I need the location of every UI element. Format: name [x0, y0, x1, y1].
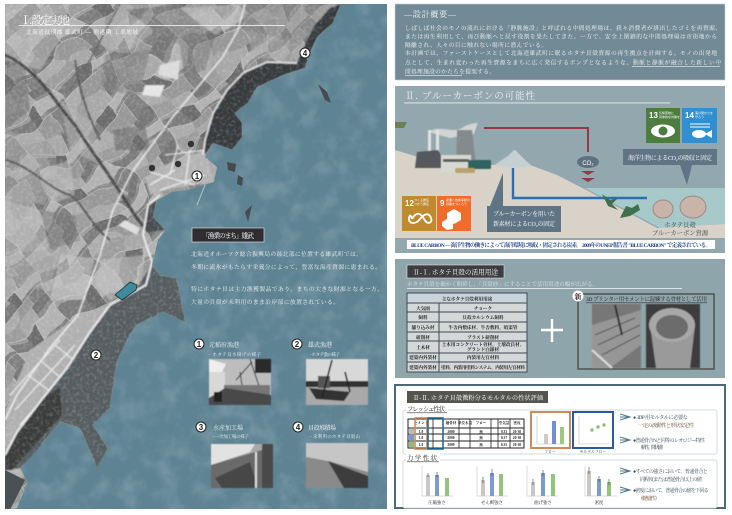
- roads: [5, 4, 245, 420]
- panel: blue carbon: [395, 86, 725, 253]
- fresh findings: 一定の流動性と形状安定性: [638, 421, 695, 429]
- shell label: [652, 220, 709, 237]
- icon: SDG 12: 12: [405, 199, 414, 208]
- chart: density: [585, 466, 617, 506]
- icon: SDG 9: [437, 196, 471, 231]
- table: mix data: 無: [479, 435, 483, 440]
- photo 3: processing plant: 水産加工場: [213, 424, 243, 432]
- map markers: [91, 48, 310, 360]
- photo 4: shell pile: 貝殻堆積場: [308, 424, 336, 432]
- icon: snowy hills: [494, 150, 532, 168]
- icon: SDG 13: 具体的な対策を: [659, 114, 680, 119]
- table: shell usage: 研削材: [416, 334, 430, 341]
- chart: density: 密度: [595, 499, 604, 506]
- icon: SDG 14: 海の豊かさを: [695, 110, 713, 115]
- green corner: [395, 122, 407, 128]
- shell label: ブルーカーボン資源: [652, 228, 709, 237]
- text block: town description: 大量の貝殻が未利用のまま沿岸部に放置されている。: [191, 298, 339, 306]
- panel: shell uses: [395, 259, 725, 378]
- table: shell usage: 大気圏: [416, 305, 430, 312]
- text block: town description: 北海道オホーツク総合振興局の最北部に位置する雄武町では、: [191, 250, 362, 258]
- panel: 3D printing aggregate: 新: [574, 292, 582, 301]
- photo 2: boat: [292, 339, 368, 405]
- table: shell usage: 土木材: [416, 344, 430, 351]
- photo 2: boat: 雄武漁港: [308, 341, 332, 349]
- blue carbon definition: [407, 240, 715, 249]
- photo 2: boat: - ホタテ漁の様子: [310, 351, 340, 358]
- heading: shell uses: [407, 265, 682, 289]
- chart: flow: フロー: [544, 450, 556, 454]
- table: mix data: 密度: [513, 420, 521, 425]
- ravines: [5, 55, 150, 232]
- site polygon: [115, 282, 137, 300]
- chart: flow: [531, 412, 570, 454]
- chart: flow retention: モルタルフロー: [580, 449, 606, 454]
- section: mechanical properties: [403, 453, 717, 508]
- table: shell usage: 建築内外装材: [409, 364, 437, 371]
- table: shell usage: チョーク: [474, 305, 492, 312]
- table: shell usage: 建築内外装材: [409, 354, 437, 361]
- arrow: CO2 emission: [484, 128, 588, 152]
- heading: shell uses: Ⅱ-Ⅰ. ホタテ貝殻の活用用途: [413, 268, 498, 276]
- photo 1: harbour: - ホタテ貝水揚げの様子: [209, 351, 262, 358]
- heading: mortar evaluation: [407, 391, 548, 403]
- icon: SDG 14: [682, 108, 717, 143]
- table: mix data: 20-30: [513, 430, 521, 434]
- chart: flow retention: [573, 412, 613, 454]
- chart: bending strength: [527, 466, 558, 506]
- aerial land: [5, 4, 341, 509]
- overview text: または再生利用して、再び動脈へと戻す役割を果たしてきた。一方で、安全上閉鎖的な中間処理場は市街地から: [405, 32, 717, 40]
- table: mix data: フロー: [476, 421, 487, 425]
- town south: [5, 305, 110, 455]
- icon: SDG 12: つくる責任: [414, 197, 429, 202]
- fresh findings: （粘性、降伏値）: [638, 443, 666, 451]
- fresh findings: [620, 413, 706, 451]
- icon: scallop shells: [653, 196, 706, 218]
- table: shell usage: 主なホタテ貝殻利用用途: [442, 296, 493, 302]
- overview text: しばしば社会のモノの流れにおける「静脈施設」と呼ばれる中間処理場は、我々消費者が排出したゴミを再資源、: [405, 24, 721, 32]
- table: mix data: 2000: [447, 436, 455, 440]
- icon: factory: [415, 122, 491, 173]
- CO2 badge: CO₂: [582, 161, 594, 167]
- heading: blue carbon: Ⅱ. ブルーカーボンの可能性: [405, 90, 535, 102]
- section: mechanical properties: 力学性状: [407, 453, 438, 462]
- table: mix data: 0.33: [501, 430, 507, 434]
- table: mix data: セメント: [414, 420, 428, 425]
- map markers: 2: [94, 351, 99, 360]
- photo 1: harbour: 1: [197, 340, 202, 349]
- map markers: 1: [195, 172, 200, 181]
- chart: shear strength: [477, 466, 508, 506]
- overview heading: ―設計概要―: [403, 9, 457, 19]
- table: mix data: 2000: [447, 443, 455, 447]
- overview text: 本計画では、ファーストケースとして北海道雄武町に眠るホタテ貝殻資源の再生拠点を計画する。モノの出発地: [405, 49, 717, 57]
- icon: SDG 13: 13: [649, 111, 658, 120]
- icon: seaweed: [602, 194, 640, 218]
- chart: shear strength: せん断強さ: [481, 499, 503, 506]
- icon: SDG 12: [402, 196, 436, 231]
- CO2 badge: [577, 156, 599, 182]
- section: fresh properties: フレッシュ性状: [407, 404, 446, 413]
- photo 1: harbour: 元稲府漁港: [209, 341, 239, 349]
- icon: SDG 13: 気候変動に: [659, 110, 674, 115]
- mechanical findings: 同程度または普通骨合以上の値: [640, 475, 703, 483]
- text block: town description: 冬期に流氷がもたらす栄養分によって、豊富な海産資源に恵まれる。: [191, 263, 381, 271]
- photo 3: processing plant: [196, 422, 273, 488]
- callout: marine absorption: [623, 149, 717, 185]
- icon: SDG 12: つかう責任: [414, 201, 429, 206]
- table: mix data: 1.0: [419, 436, 423, 440]
- table: shell usage: 内装用左官材料: [467, 354, 499, 361]
- section: fresh properties: [403, 404, 717, 454]
- photo: printed cylinder: [646, 304, 700, 368]
- sea band: [585, 188, 725, 228]
- table: shell usage: 塗料、内装用塗料システム、内装用左官材料: [441, 364, 525, 371]
- panel: site map: [0, 0, 387, 515]
- photo: printer: [592, 304, 641, 368]
- arrow: carbon fixation: [513, 168, 647, 198]
- photo 4: shell pile: 4: [296, 423, 301, 432]
- panel: design overview: [395, 4, 725, 80]
- photo 2: boat: 2: [295, 340, 300, 349]
- photo 4: shell pile: - 未利用のホタテ貝殻山: [310, 433, 360, 440]
- label: town of fishery: [192, 228, 264, 242]
- photo 1: harbour: [194, 339, 271, 405]
- table: mix data: 単位水量: [458, 420, 473, 425]
- mechanical findings: ●すべての強さにおいて、普通骨合と: [633, 467, 708, 475]
- table: shell usage: 土木用コンクリート骨材、土壌改良材、: [442, 341, 524, 348]
- chart: compressive strength: 圧縮強さ: [428, 499, 446, 506]
- icon: SDG 9: 9: [440, 199, 445, 208]
- heading: site title: Ⅰ. 設定実地: [20, 13, 70, 27]
- overview text: [405, 24, 721, 76]
- photo 3: processing plant: - 一次加工場の様子: [213, 433, 250, 440]
- chart: bending strength: 曲げ強さ: [534, 499, 552, 506]
- label: town of fishery: 「漁業のまち」雄武: [202, 231, 254, 240]
- table: mix data: 0.35: [501, 443, 507, 447]
- icon: SDG 9: 産業と技術革新の: [446, 197, 470, 202]
- fresh findings: ● 3DP 用モルタルに必要な: [633, 413, 688, 421]
- site subtitle: 北海道紋別郡 雄武町 ― 漁港隣 工業地域: [26, 28, 138, 36]
- mechanical findings: （軽量性）: [638, 494, 660, 502]
- land section: [395, 150, 725, 238]
- dark rocky coast: [203, 4, 341, 155]
- table: shell usage: 飼料: [418, 314, 428, 321]
- photo 4: shell pile: [293, 422, 368, 488]
- table: mix data: 1.0: [419, 430, 423, 434]
- table: shell usage: 舗り込み材: [412, 324, 435, 331]
- icon: SDG 14: 守ろう: [695, 114, 704, 119]
- text block: town description: [191, 250, 383, 306]
- heading: site title: [19, 13, 285, 36]
- harbour jetties: [197, 185, 205, 205]
- blue carbon definition: BLUE CARBON ― 海洋生物の働きによって海洋環境に吸収・固定される炭素。 2009年のUNEP報告書 "BLUE CARBON" で定義されている。: [411, 241, 711, 249]
- table: mix data: 0.37: [501, 436, 507, 440]
- mechanical findings: ●密度において、普通骨合の値を下回る: [633, 486, 709, 494]
- photo 3: processing plant: 3: [199, 423, 204, 432]
- callout: marine absorption: 海洋生物によるCO₂の吸収と固定: [628, 154, 712, 162]
- panel: 3D printing aggregate: 3D プリンター用セメントに混練する骨材として活用: [586, 295, 707, 303]
- town north: [145, 150, 214, 195]
- heading: mortar evaluation: Ⅱ-Ⅱ. ホタテ貝殻微粉分るモルタルの性状評価: [413, 394, 543, 402]
- sea: [5, 4, 387, 509]
- table: mix data: [408, 419, 524, 448]
- icon: SDG 13: [646, 108, 680, 143]
- map markers: 4: [303, 49, 308, 58]
- callout: new material: 新素材によるCO₂の固定: [493, 220, 555, 228]
- table: shell usage: ブラスト研削材: [467, 334, 499, 341]
- icon: SDG 14: 14: [685, 111, 694, 120]
- shell label: ホタテ貝殻: [664, 220, 696, 229]
- table: shell usage: [407, 293, 527, 372]
- chart: compressive strength: [422, 466, 453, 506]
- table: mix data: 20-30: [513, 443, 521, 447]
- table: shell usage: 貝殻カルシウム飼料: [462, 314, 504, 321]
- sea rocks: [227, 84, 331, 222]
- table: mix data: 空気量: [499, 420, 510, 425]
- heading: shell uses: ホタテ貝殻を細かく粉砕し、「貝殻砂」にすることで活用用途の幅が広がる。: [407, 280, 598, 288]
- overview text: 隔離され、人々の目に触れない場所に潜んでいる。: [405, 41, 547, 49]
- overview text: 間処理施設のかたちを提案する。: [405, 68, 495, 76]
- table: mix data: 無: [479, 442, 483, 447]
- plus sign: [541, 319, 563, 342]
- overview text: 点として、生まれ変わった再生資源をまちに広く発信するポンプとなるような、動脈と静脈が融合した新しい中: [405, 58, 721, 66]
- table: mix data: 細骨材: [446, 420, 457, 425]
- table: shell usage: グランド白線材: [467, 346, 499, 353]
- icon: SDG 9: 基盤をつくろう: [446, 201, 467, 206]
- bottom left sea rock: [5, 470, 25, 510]
- panel: mortar evaluation: [395, 385, 725, 508]
- mechanical findings: [620, 467, 709, 502]
- text block: town description: 特にホタテ貝は主力漁獲製品であり、まちの大きな財源となる一方、: [191, 285, 383, 293]
- table: mix data: 20-30: [513, 436, 521, 440]
- table: mix data: 無: [479, 429, 483, 434]
- panel: 3D printing aggregate: [572, 290, 714, 369]
- table: shell usage: 牛舎内敷床材、牛舎敷料、暗渠管: [449, 324, 518, 331]
- table: mix data: 1.0: [419, 443, 423, 447]
- callout: new material: [487, 173, 561, 232]
- callout: new material: ブルーカーボンを用いた: [493, 210, 555, 218]
- fresh findings: ●普通骨合 N と同等のレオロジー特性: [633, 436, 706, 444]
- table: mix data: 2000: [447, 430, 455, 434]
